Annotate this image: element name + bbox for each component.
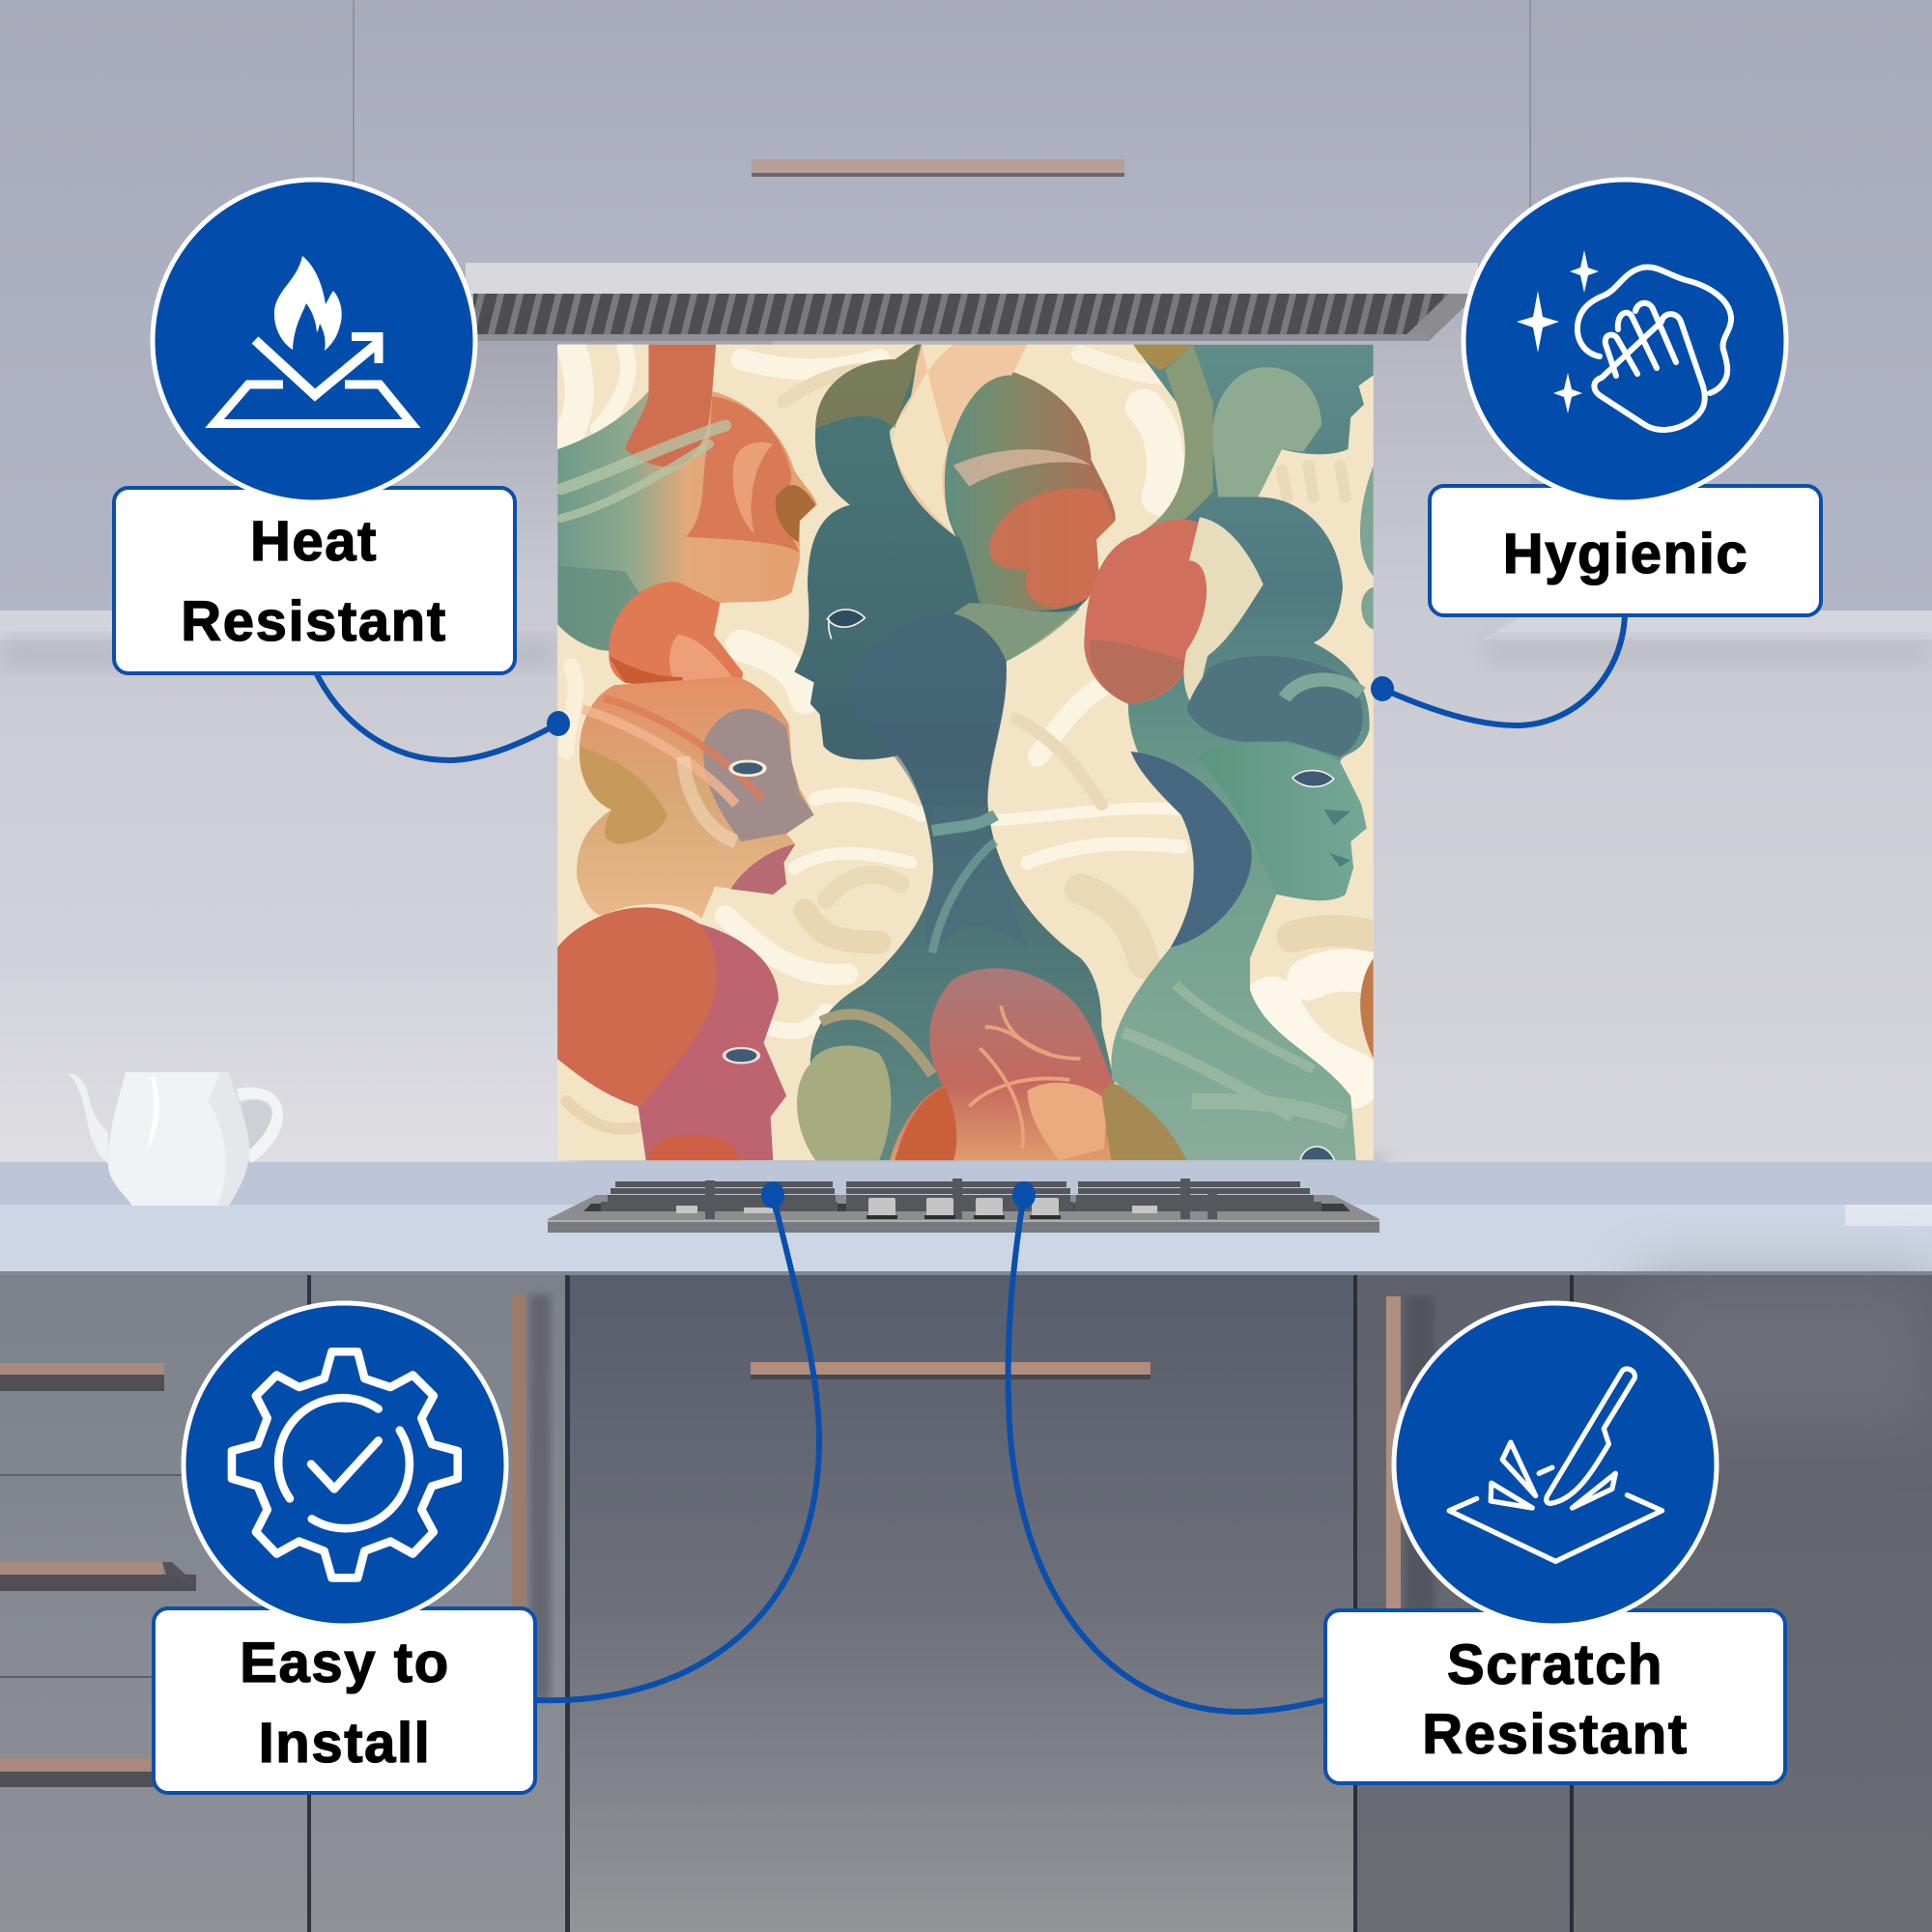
connector: hygienic to panel: [1371, 614, 1625, 725]
badge: easy to install: [184, 1303, 506, 1626]
central teal figure: [794, 345, 1115, 1160]
label box: easy to install: Easy to: [240, 1632, 450, 1694]
pink head silhouette bottom-left: [557, 907, 786, 1160]
red bun right figure: [1084, 520, 1211, 703]
icon: knife scratching surface: [1449, 1369, 1662, 1561]
right figure lower leaves: [1122, 984, 1346, 1122]
central hair right side: [945, 370, 1115, 611]
dark hair right figure: [1131, 752, 1252, 948]
right figure silhouette: [1084, 345, 1374, 1160]
label box: hygienic: Hygienic: [1503, 523, 1748, 585]
orange-red bun: [609, 582, 743, 695]
wall: [0, 328, 1932, 1179]
gas cooktop: [548, 1179, 1379, 1233]
countertop: [0, 1162, 1932, 1276]
label box: scratch resistant: [1325, 1610, 1785, 1783]
cream swirl pattern: [566, 349, 1374, 1129]
badge: scratch resistant: [1394, 1303, 1717, 1626]
label box: easy to install: [154, 1608, 535, 1793]
lower-left face details: [580, 698, 814, 895]
badge: heat resistant: [153, 180, 475, 502]
label box: heat resistant: Resistant: [181, 590, 447, 653]
label box: easy to install: Install: [259, 1712, 431, 1775]
icon: gear with check mark: [232, 1351, 458, 1577]
top-left hair overlays: [625, 345, 815, 553]
brown shape bottom: [1101, 1083, 1189, 1160]
label box: hygienic: [1430, 486, 1821, 615]
label box: scratch resistant: Scratch: [1447, 1634, 1663, 1696]
connector: easy to install to cooktop: [537, 1181, 819, 1700]
teapot: [68, 1072, 283, 1206]
top-left green leaf bands: [561, 426, 725, 518]
patterned glass splashback artwork: [551, 338, 1381, 1169]
lower cabinets: [0, 1275, 1932, 1932]
right figure eye and lips: [1293, 771, 1350, 867]
label box: heat resistant: Heat: [250, 510, 378, 573]
green face right figure: [1197, 741, 1367, 900]
orange round hair overlap: [557, 907, 717, 1106]
label box: scratch resistant: Resistant: [1422, 1703, 1689, 1766]
bottom centre details: [797, 1006, 1107, 1160]
lower-left face silhouette: [577, 676, 814, 919]
connector: heat resistant to panel: [314, 668, 570, 760]
eye: lower left figures: [723, 760, 767, 1064]
cabinet handle: top: [752, 159, 1124, 177]
label box: heat resistant: [114, 488, 515, 673]
shadow under artwork: [570, 1154, 1381, 1181]
connector: scratch resistant to cooktop: [1009, 1181, 1323, 1712]
icon: flame over surface with reflected arrow: [214, 256, 412, 423]
central face eye: [827, 610, 865, 639]
badge: hygienic: [1463, 180, 1786, 502]
right figure top head: [1133, 345, 1321, 534]
cream background: [551, 338, 1381, 1169]
icon: hand wiping with sparkles: [1517, 250, 1731, 430]
top-left face silhouette: [557, 345, 817, 651]
lower cabinet handles: [0, 1294, 1435, 1787]
range hood: [466, 263, 1478, 341]
edge pieces right side: [1300, 466, 1374, 1160]
bottom centre red-orange head: [890, 968, 1115, 1160]
cream hair strand right figure: [1183, 517, 1264, 709]
upper cabinets: [0, 0, 1932, 668]
